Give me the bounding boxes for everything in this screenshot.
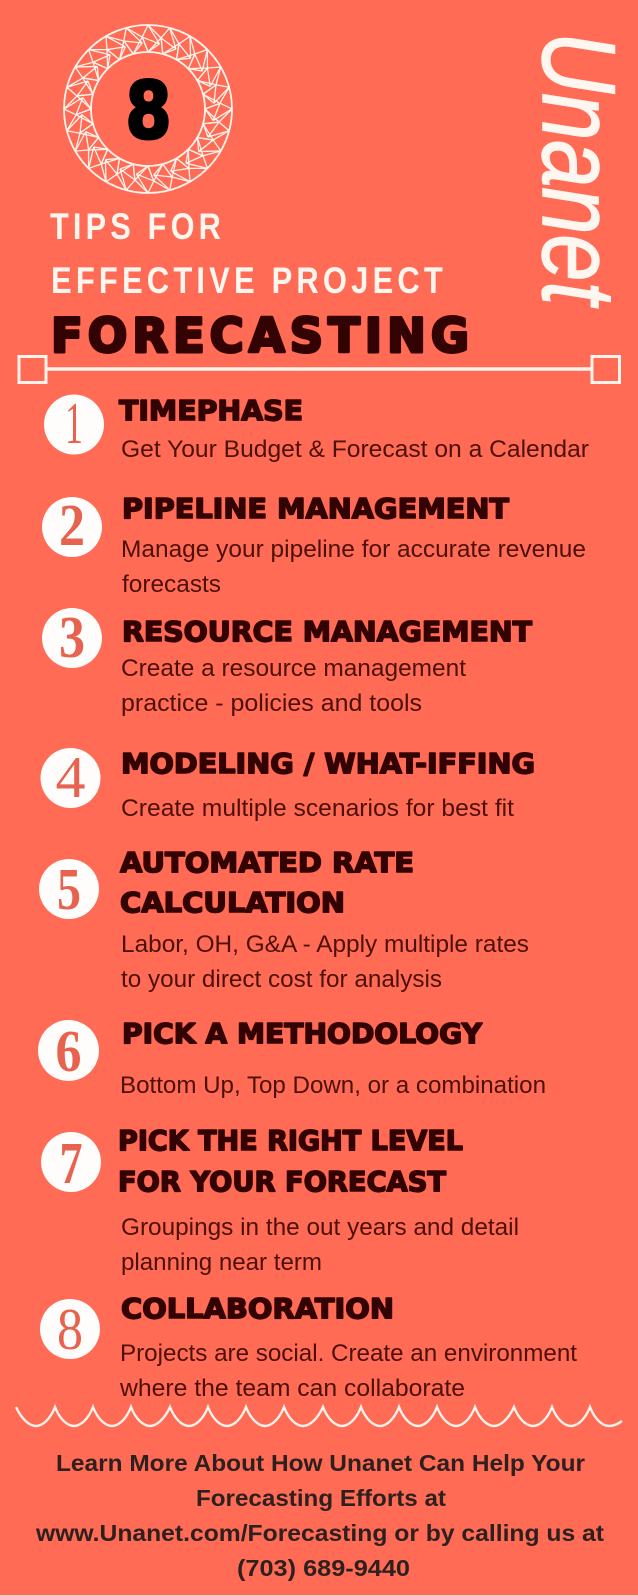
- description: planning near term: [121, 1249, 322, 1276]
- heading: [120, 846, 414, 919]
- description: [121, 536, 586, 598]
- heading: RESOURCE MANAGEMENT: [122, 615, 532, 648]
- tip 4: modeling / what-iffing: [40, 744, 535, 822]
- description: Projects are social. Create an environment: [120, 1340, 577, 1367]
- description: forecasts: [122, 571, 221, 598]
- heading: TIMEPHASE: [119, 394, 303, 427]
- call to action footer: Learn More About How Unanet Can Help Your: [56, 1450, 585, 1476]
- description: Create multiple scenarios for best fit: [121, 795, 514, 822]
- description: Groupings in the out years and detail: [121, 1214, 519, 1241]
- heading: AUTOMATED RATE: [120, 846, 414, 879]
- number badge 8: [40, 1296, 100, 1362]
- title: [50, 206, 474, 364]
- description: Bottom Up, Top Down, or a combination: [120, 1072, 546, 1099]
- number badge 5: 5: [57, 856, 81, 922]
- scalloped divider: [16, 1407, 622, 1426]
- tip 3: resource management: [42, 604, 532, 717]
- number badge 1: [44, 390, 104, 456]
- description: [121, 655, 466, 717]
- heading: FOR YOUR FORECAST: [118, 1165, 446, 1198]
- description: Get Your Budget & Forecast on a Calendar: [121, 436, 589, 463]
- heading: [118, 1124, 463, 1198]
- number badge 2: 2: [59, 492, 85, 558]
- description: to your direct cost for analysis: [121, 966, 442, 993]
- tip 8: collaboration: [40, 1292, 577, 1402]
- tip 6: pick a methodology: [38, 1017, 546, 1099]
- description: where the team can collaborate: [119, 1375, 465, 1402]
- number badge 6: [38, 1018, 99, 1084]
- description: [121, 931, 529, 993]
- description: Create a resource management: [121, 655, 466, 682]
- tip 7: pick the right level: [41, 1124, 519, 1276]
- number badge 4: [40, 744, 100, 810]
- number badge 2: [42, 492, 102, 558]
- icon: geometric ring with number 8: [60, 21, 236, 197]
- title: EFFECTIVE PROJECT: [51, 260, 447, 301]
- heading: CALCULATION: [120, 886, 345, 919]
- heading: PICK THE RIGHT LEVEL: [118, 1124, 463, 1157]
- tip 1: timephase: [44, 390, 589, 463]
- number badge 3: [42, 604, 102, 670]
- description: practice - policies and tools: [121, 690, 422, 717]
- logo: Unanet vertical wordmark: Unanet: [520, 32, 636, 308]
- number badge 7: 7: [60, 1130, 82, 1196]
- call to action footer: (703) 689-9440: [237, 1555, 410, 1581]
- title: TIPS FOR: [50, 206, 225, 247]
- icon: geometric ring with number 8: 8: [126, 67, 172, 157]
- call to action footer: Forecasting Efforts at: [196, 1485, 446, 1511]
- call to action footer: [35, 1450, 604, 1581]
- tip 2: pipeline management: [42, 492, 586, 598]
- description: Labor, OH, G&A - Apply multiple rates: [121, 931, 529, 958]
- call to action footer: www.Unanet.com/Forecasting or by calling us at: [35, 1520, 604, 1546]
- number badge 4: 4: [56, 744, 86, 810]
- number badge 6: 6: [56, 1018, 82, 1084]
- number badge 8: 8: [57, 1296, 83, 1362]
- description: [121, 1214, 519, 1276]
- number badge 3: 3: [59, 604, 85, 670]
- number badge 1: 1: [65, 390, 83, 456]
- number badge 7: [41, 1130, 101, 1196]
- title: FORECASTING: [51, 309, 474, 364]
- title divider with end squares: [19, 356, 620, 382]
- tip 5: automated rate calculation: [39, 846, 529, 993]
- heading: COLLABORATION: [121, 1292, 394, 1325]
- description: Manage your pipeline for accurate revenue: [121, 536, 586, 563]
- heading: PIPELINE MANAGEMENT: [122, 492, 509, 525]
- number badge 5: [39, 856, 99, 922]
- heading: MODELING / WHAT-IFFING: [121, 747, 535, 780]
- description: [119, 1340, 577, 1402]
- heading: PICK A METHODOLOGY: [122, 1017, 483, 1050]
